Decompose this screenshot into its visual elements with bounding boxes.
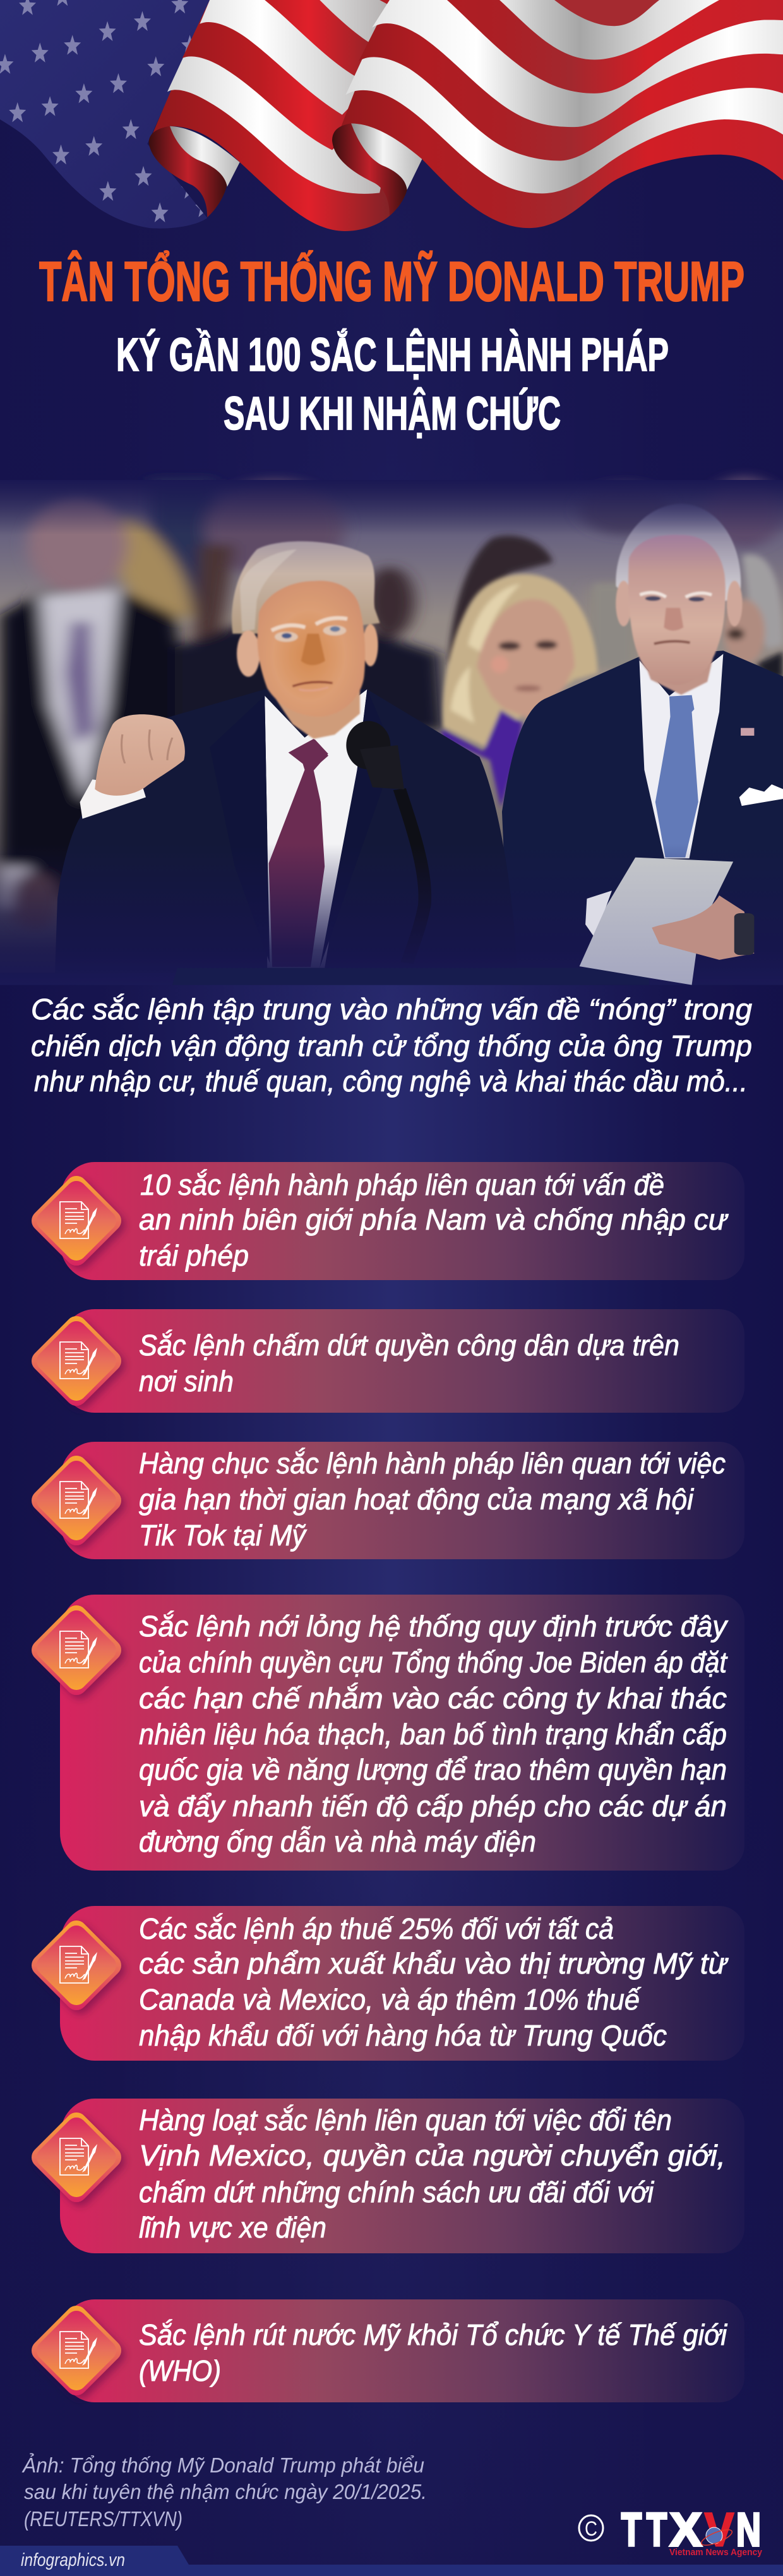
icon: document and pen [42,1466,111,1535]
panel: card 7 WHO [42,2299,744,2402]
intro text: như nhập cư, thuế quan, công nghệ và khai thác dầu mỏ... [34,1065,748,1098]
Jill Biden [442,574,597,808]
photo fades [0,480,783,985]
text: card 2: Sắc lệnh chấm dứt quyền công dân dựa trên [139,1329,679,1362]
text: card 6: lĩnh vực xe điện [139,2211,326,2244]
panel: card 5 tariffs [42,1906,744,2061]
paper and hand of Biden [580,858,754,985]
panel: card 4 energy [42,1595,744,1871]
logo: TTXVN Vietnam News Agency: V [705,2503,734,2556]
icon: document and pen [42,2123,111,2191]
icon: document and pen [42,1931,111,1999]
footer website: infographics.vn [21,2550,125,2570]
text: card 6: chấm dứt những chính sách ưu đãi đối với [139,2176,655,2208]
Trump [55,541,517,973]
Biden [502,503,783,985]
text: card 4: nhiên liệu hóa thạch, ban bố tình trạng khẩn cấp [139,1718,727,1751]
flag front stripes [332,0,783,228]
photo caption: Ảnh: Tổng thống Mỹ Donald Trump phát biểu [21,2453,424,2477]
panel: card 2 birthright citizenship [42,1309,744,1413]
text: card 5: các sản phẩm xuất khẩu vào thị trường Mỹ từ [139,1947,729,1980]
icon: document and pen [42,1327,111,1395]
panel: card 6 renaming and EV [42,2099,744,2253]
text: card 7: (WHO) [139,2354,221,2387]
text: card 1: 10 sắc lệnh hành pháp liên quan tới vấn đề [140,1168,664,1201]
logo: TTXVN Vietnam News Agency: Vietnam News Agency [669,2547,763,2558]
subtitle: SAU KHI NHẬM CHỨC [224,387,561,440]
text: card 1: trái phép [139,1239,249,1272]
icon: document and pen [42,2316,111,2385]
photo caption [21,2453,427,2531]
flag [0,0,783,232]
text: card 1: an ninh biên giới phía Nam và chống nhập cư [139,1203,729,1236]
text: card 3: Hàng chục sắc lệnh hành pháp liên quan tới việc [139,1447,726,1480]
panel: card 1 border security [42,1162,744,1280]
text: card 7: Sắc lệnh rút nước Mỹ khỏi Tổ chức Y tế Thế giới [139,2318,728,2351]
copyright symbol [579,2515,603,2541]
intro text: chiến dịch vận động tranh cử tổng thống của ông Trump [31,1029,752,1062]
blurred background crowd [0,477,783,931]
text: card 5: Canada và Mexico, và áp thêm 10% thuế [139,1983,642,2016]
text: card 4: quốc gia về năng lượng để trao thêm quyền hạn [139,1753,727,1786]
flag back stripes [149,0,395,231]
icon: document and pen [42,1187,111,1255]
logo: TTXVN Vietnam News Agency [621,2503,763,2558]
footer bar [0,2546,783,2576]
text: card 4: các hạn chế nhắm vào các công ty khai thác [139,1682,727,1715]
logo: TTXVN Vietnam News Agency: T [621,2503,642,2556]
icon: document and pen [42,1616,111,1684]
intro text [31,993,752,1098]
flag canton with stars [0,0,215,232]
photo caption: sau khi tuyên thệ nhậm chức ngày 20/1/2025. [24,2480,427,2503]
people behind, right side [448,536,783,680]
logo: TTXVN Vietnam News Agency: X [670,2503,702,2556]
text: card 6: Vịnh Mexico, quyền của người chuyển giới, [139,2139,726,2172]
panel: card 3 TikTok [42,1442,744,1559]
text: card 2 [139,1329,679,1398]
text: card 2: nơi sinh [139,1365,234,1398]
text: card 4 [139,1610,729,1858]
text: card 5: Các sắc lệnh áp thuế 25% đối với tất cả [139,1912,614,1945]
text: card 5 [139,1912,729,2052]
photo caption: (REUTERS/TTXVN) [24,2507,182,2531]
text: card 1 [139,1168,729,1272]
logo: TTXVN Vietnam News Agency: T [647,2503,667,2556]
text: card 3: gia hạn thời gian hoạt động của mạng xã hội [139,1483,695,1516]
text: card 4: Sắc lệnh nới lỏng hệ thống quy định trước đây [139,1610,729,1643]
logo: TTXVN Vietnam News Agency: N [736,2503,761,2556]
text: card 4: và đẩy nhanh tiến độ cấp phép cho các dự án [139,1790,727,1823]
text: card 6 [139,2104,726,2244]
flag front fold [332,123,422,216]
text: card 3: Tik Tok tại Mỹ [139,1519,308,1552]
text: card 4: của chính quyền cựu Tổng thống Joe Biden áp đặt [139,1646,728,1679]
text: card 4: đường ống dẫn và nhà máy điện [139,1825,536,1858]
text: card 3 [139,1447,726,1552]
photo: Trump and Biden [0,477,783,985]
text: card 7 [139,2318,728,2387]
text: card 5: nhập khẩu đối với hàng hóa từ Trung Quốc [139,2019,667,2052]
text: card 6: Hàng loạt sắc lệnh liên quan tới việc đổi tên [139,2104,672,2136]
copyright symbol: C [585,2517,597,2540]
intro text: Các sắc lệnh tập trung vào những vấn đề “nóng” trong [31,993,752,1026]
Trump head [232,541,404,789]
flag back fold [149,126,240,217]
subtitle [116,328,669,440]
